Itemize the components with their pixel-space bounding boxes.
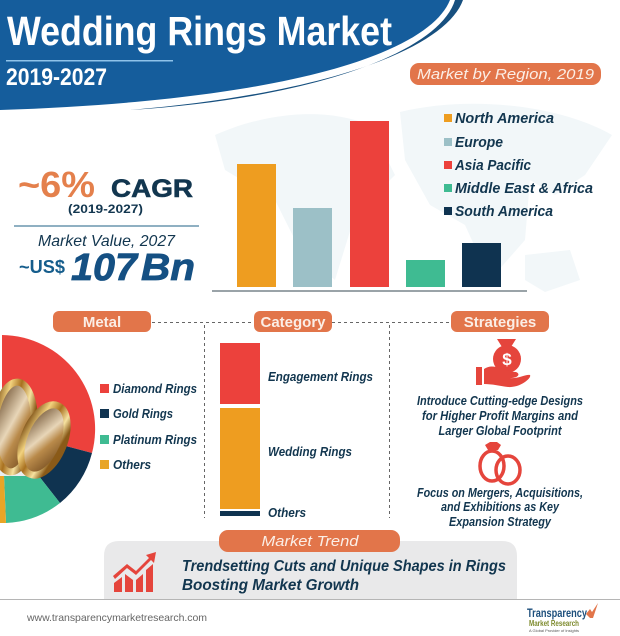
heading pill: strategies <box>451 311 549 332</box>
text: strategy two <box>417 486 583 529</box>
heading pill: market by region: Market by Region, 2019 <box>417 66 595 83</box>
text: strategy two: Expansion Strategy <box>449 515 552 529</box>
title: Wedding Rings Market <box>7 8 392 54</box>
logo: A Global Provider of Insights <box>529 628 579 633</box>
legend: metal <box>100 381 197 472</box>
text: strategy one: Larger Global Footprint <box>438 424 562 438</box>
icon: rising chart <box>113 552 156 592</box>
legend: metal: Gold Rings <box>113 406 173 421</box>
title: 2019-2027 <box>6 64 107 91</box>
bar chart: market by region <box>212 121 527 292</box>
heading pill: metal: Metal <box>83 314 121 331</box>
market value stat: Market Value, 2027 <box>38 233 176 250</box>
legend: regions: South America <box>455 203 553 220</box>
text: strategy one: Introduce Cutting-edge Designs <box>417 394 583 408</box>
stacked bar labels <box>268 369 373 520</box>
footer rule <box>0 599 620 600</box>
stacked bar labels: Wedding Rings <box>268 444 352 459</box>
icon: engagement rings <box>480 442 520 484</box>
heading pill: strategies: Strategies <box>464 314 536 331</box>
text: trend: Trendsetting Cuts and Unique Shapes in Rings <box>182 558 506 575</box>
CAGR stat: ~6% <box>18 164 95 205</box>
logo: Market Research <box>529 619 579 628</box>
heading pill: market trend: Market Trend <box>262 533 359 550</box>
heading pill: market trend <box>219 530 400 552</box>
legend: metal: Diamond Rings <box>113 381 197 396</box>
heading pill: category <box>254 311 332 332</box>
heading pill: market by region <box>410 63 601 85</box>
market value stat: Bn <box>141 247 195 289</box>
logo <box>527 603 598 633</box>
text: strategy one <box>417 394 583 438</box>
text: trend: Boosting Market Growth <box>182 577 359 594</box>
market value stat: ~US$ <box>19 257 65 277</box>
heading pill: metal <box>53 311 151 332</box>
legend: regions: Europe <box>455 134 503 151</box>
legend: metal: Platinum Rings <box>113 432 197 447</box>
legend: metal: Others <box>113 457 151 472</box>
text: strategy two: Focus on Mergers, Acquisitions, <box>417 486 583 500</box>
legend: regions: Asia Pacific <box>454 157 532 174</box>
market value stat: 107 <box>71 247 139 289</box>
icon: money bag in hand: $ <box>502 350 512 369</box>
CAGR stat: CAGR <box>111 175 193 203</box>
header banner <box>0 0 463 110</box>
CAGR stat <box>14 164 199 227</box>
connector lines <box>152 322 451 518</box>
text: strategy one: for Higher Profit Margins and <box>422 409 578 423</box>
legend: regions: North America <box>455 110 554 127</box>
icon: money bag in hand <box>476 339 530 387</box>
text: strategy two: and Exhibitions as Key <box>441 500 560 514</box>
market value stat <box>19 233 195 289</box>
logo: Transparency <box>527 606 587 620</box>
pie chart: metal <box>0 335 95 523</box>
legend: regions: Middle East & Africa <box>455 180 593 197</box>
title <box>6 8 392 91</box>
background world map <box>215 104 612 292</box>
text: trend <box>182 558 506 594</box>
stacked bar labels: Engagement Rings <box>268 369 373 384</box>
heading pill: category: Category <box>260 314 326 331</box>
panel: market trend <box>104 541 517 600</box>
CAGR stat: (2019-2027) <box>68 202 143 216</box>
stacked bar labels: Others <box>268 505 306 520</box>
icon: gold rings <box>0 380 76 482</box>
stacked bar: category <box>220 343 260 516</box>
legend: regions <box>444 110 593 220</box>
footer url: www.transparencymarketresearch.com <box>26 612 207 624</box>
